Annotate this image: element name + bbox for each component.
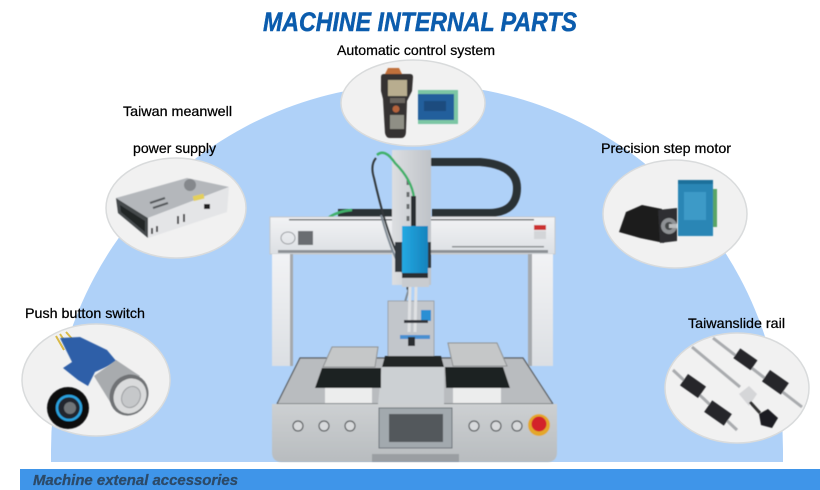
control buttons xyxy=(293,421,522,431)
green wire rear xyxy=(328,210,352,218)
frame top bar xyxy=(270,217,555,254)
left fixture base xyxy=(315,368,381,388)
screw shaft xyxy=(409,287,416,332)
label: precision step motor: Precision step motor xyxy=(601,140,731,156)
label: power supply line 2: power supply xyxy=(133,140,216,156)
frame brand text xyxy=(452,225,546,248)
footer band xyxy=(20,469,820,490)
emergency stop xyxy=(528,414,550,436)
right fixture base xyxy=(445,367,510,388)
center deck xyxy=(378,366,444,404)
panel: automatic control system xyxy=(341,60,485,146)
right fixture plate xyxy=(448,343,507,366)
deck xyxy=(277,358,553,404)
nozzle assembly xyxy=(400,320,430,346)
connector xyxy=(411,196,416,226)
icon: step motor xyxy=(619,205,677,243)
frame right leg xyxy=(528,254,553,366)
icon: blue connector xyxy=(60,337,117,386)
column fasteners xyxy=(406,180,410,228)
right white foot xyxy=(453,388,501,403)
center dark base xyxy=(382,356,444,367)
driver base xyxy=(402,273,428,278)
panel: slide rail xyxy=(665,333,809,443)
left white foot xyxy=(325,388,372,403)
footer text: Machine extenal accessories xyxy=(33,472,238,489)
frame qr logo xyxy=(281,231,313,245)
panel: precision step motor xyxy=(603,160,747,268)
driver side xyxy=(395,242,402,272)
blue driver xyxy=(402,226,428,273)
center module xyxy=(388,301,434,363)
blue dome background xyxy=(51,84,783,462)
panel: push button switch xyxy=(22,324,170,436)
label: automatic control system: Automatic control system xyxy=(337,42,495,58)
frame left leg xyxy=(272,254,293,366)
cable chain xyxy=(338,162,517,213)
Z axis column xyxy=(392,150,431,285)
bottom port strip xyxy=(372,454,459,462)
black cable xyxy=(372,158,408,290)
label: push button switch: Push button switch xyxy=(25,305,145,321)
icon: metal push button xyxy=(94,360,156,422)
icon: motor driver xyxy=(678,180,717,236)
front panel xyxy=(272,404,557,462)
icon: switch wires xyxy=(56,332,74,350)
panel: power supply xyxy=(106,158,246,258)
icon: black illuminated button xyxy=(47,387,89,429)
label: power supply line 1: Taiwan meanwell xyxy=(123,103,232,119)
module label xyxy=(421,310,431,321)
touch screen xyxy=(379,408,452,448)
green cable xyxy=(377,153,414,198)
icon: handheld controller xyxy=(381,68,413,138)
title: MACHINE INTERNAL PARTS xyxy=(263,7,577,37)
grey tube xyxy=(381,215,410,312)
icon: control board xyxy=(418,90,458,124)
icon: linear rails and bearing blocks xyxy=(673,338,802,430)
machine illustration xyxy=(270,150,557,462)
label: slide rail: Taiwanslide rail xyxy=(688,315,785,331)
left fixture plate xyxy=(323,347,378,367)
icon: power supply unit xyxy=(116,178,229,238)
